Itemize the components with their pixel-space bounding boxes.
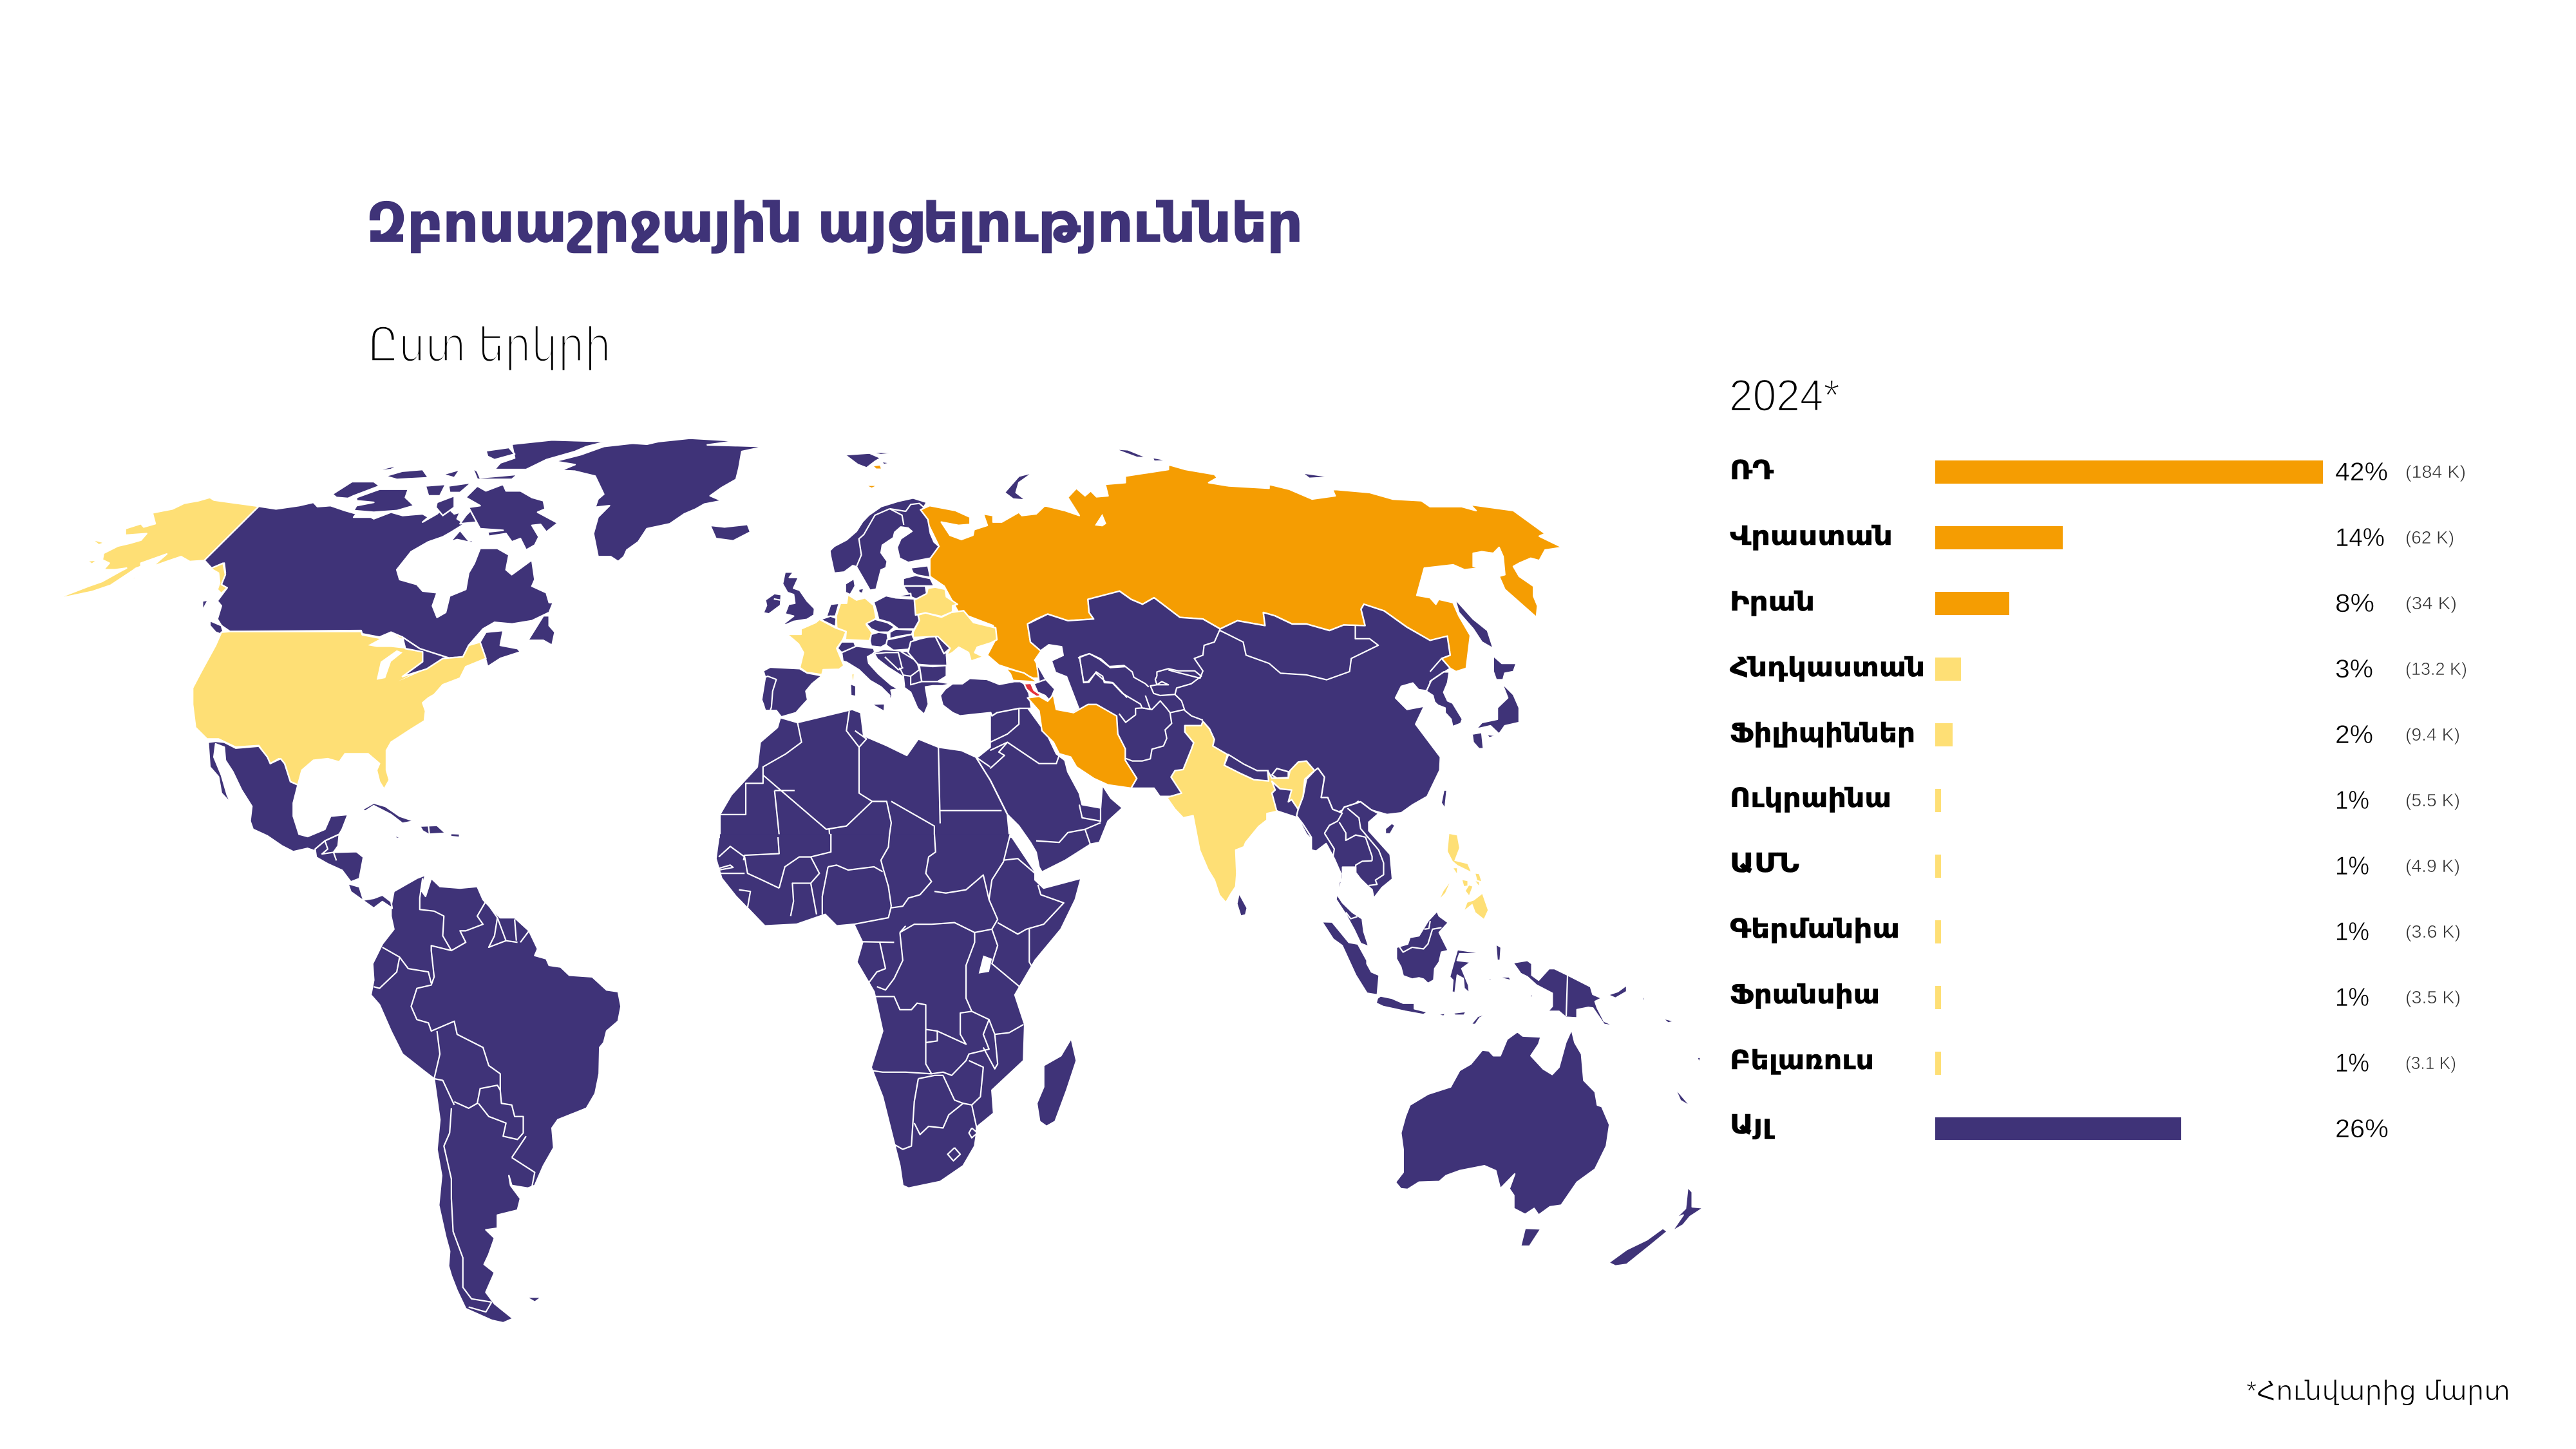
map: Southeast Asia islands, Australia and Oceania [1321, 911, 1703, 1266]
map: South America [371, 875, 621, 1323]
row: Philippines: (9.4 K) [2405, 724, 2460, 744]
map: Iran [1028, 695, 1137, 788]
subtitle: Ըստ երկրի [368, 318, 611, 372]
world map [64, 439, 1703, 1323]
row: France: Ֆրանսիա [1730, 980, 1880, 1009]
row: Russia: ՌԴ [1730, 455, 1774, 485]
map: Philippines [1441, 834, 1488, 919]
map: Russia and northern Eurasia [845, 449, 1562, 749]
row: Georgia: Վրաստան [1730, 521, 1893, 551]
row: Philippines: 2% [2335, 721, 2373, 749]
row: Ukraine: 1% [2335, 786, 2369, 815]
row: France [1730, 980, 2461, 1012]
row: Georgia [1730, 521, 2454, 552]
row: India [1730, 652, 2467, 683]
map: Scandinavia and Finland [830, 498, 939, 591]
row: Ukraine: (5.5 K) [2405, 790, 2460, 810]
row: Belarus: (3.1 K) [2405, 1053, 2456, 1073]
map: Canada and Arctic islands [202, 440, 607, 677]
row: Belarus: 1% [2335, 1049, 2369, 1077]
row: Iran [1730, 587, 2457, 618]
map: Turkey, Caucasus, Caspian Sea [940, 644, 1127, 716]
row: Iran: (34 K) [2405, 593, 2457, 613]
map: Asia mainland [976, 591, 1450, 872]
row: Other [1730, 1110, 2389, 1143]
map: United States [193, 632, 486, 790]
row: Iran: 8% [2335, 589, 2374, 618]
row: Russia: (184 K) [2405, 462, 2466, 482]
row: Iran: Իրան [1730, 587, 1815, 616]
map: Europe [762, 498, 997, 726]
row: Belarus: Բելառուս [1730, 1045, 1874, 1075]
row: Germany: 1% [2335, 918, 2369, 946]
map: Africa south and Madagascar [716, 834, 1081, 1188]
map: Africa north [717, 710, 1010, 846]
title: Զբոսաշրջային այցելություններ [366, 193, 1303, 253]
map: Alaska [64, 497, 259, 597]
footnote: *Հունվարից մարտ [2246, 1376, 2510, 1406]
chart: 2024 visitors by country [1729, 370, 2467, 1143]
row: Philippines: Ֆիլիպիններ [1730, 718, 1915, 748]
row: Philippines [1730, 718, 2460, 749]
row: Ukraine: Ուկրաինա [1730, 783, 1891, 813]
row: India: (13.2 K) [2405, 659, 2467, 679]
row: Germany [1730, 914, 2461, 946]
row: Belarus [1730, 1045, 2456, 1077]
row: India: Հնդկաստան [1730, 652, 1925, 682]
row: Russia [1730, 455, 2466, 486]
map: Indochina, India and South Asia [1167, 672, 1463, 947]
row: France: (3.5 K) [2405, 987, 2461, 1007]
row: Russia: 42% [2335, 458, 2388, 486]
row: Ukraine [1730, 783, 2460, 815]
map: Greenland and Iceland [555, 439, 765, 562]
row: France: 1% [2335, 983, 2369, 1012]
row: Other: 26% [2335, 1115, 2389, 1143]
chart heading: 2024* [1729, 370, 1840, 421]
map: Central Asia borders [1078, 654, 1203, 761]
row: USA: ԱՄՆ [1730, 848, 1799, 878]
row: USA: 1% [2335, 852, 2369, 880]
row: USA [1730, 848, 2460, 880]
row: Georgia: (62 K) [2405, 527, 2454, 547]
row: Germany: (3.6 K) [2405, 922, 2461, 942]
row: Georgia: 14% [2335, 524, 2385, 552]
row: Germany: Գերմանիա [1730, 914, 1900, 943]
row: India: 3% [2335, 655, 2373, 683]
row: USA: (4.9 K) [2405, 856, 2460, 876]
map: Mexico, Central America, Caribbean [208, 741, 459, 908]
row: Other: Այլ [1730, 1110, 1775, 1139]
